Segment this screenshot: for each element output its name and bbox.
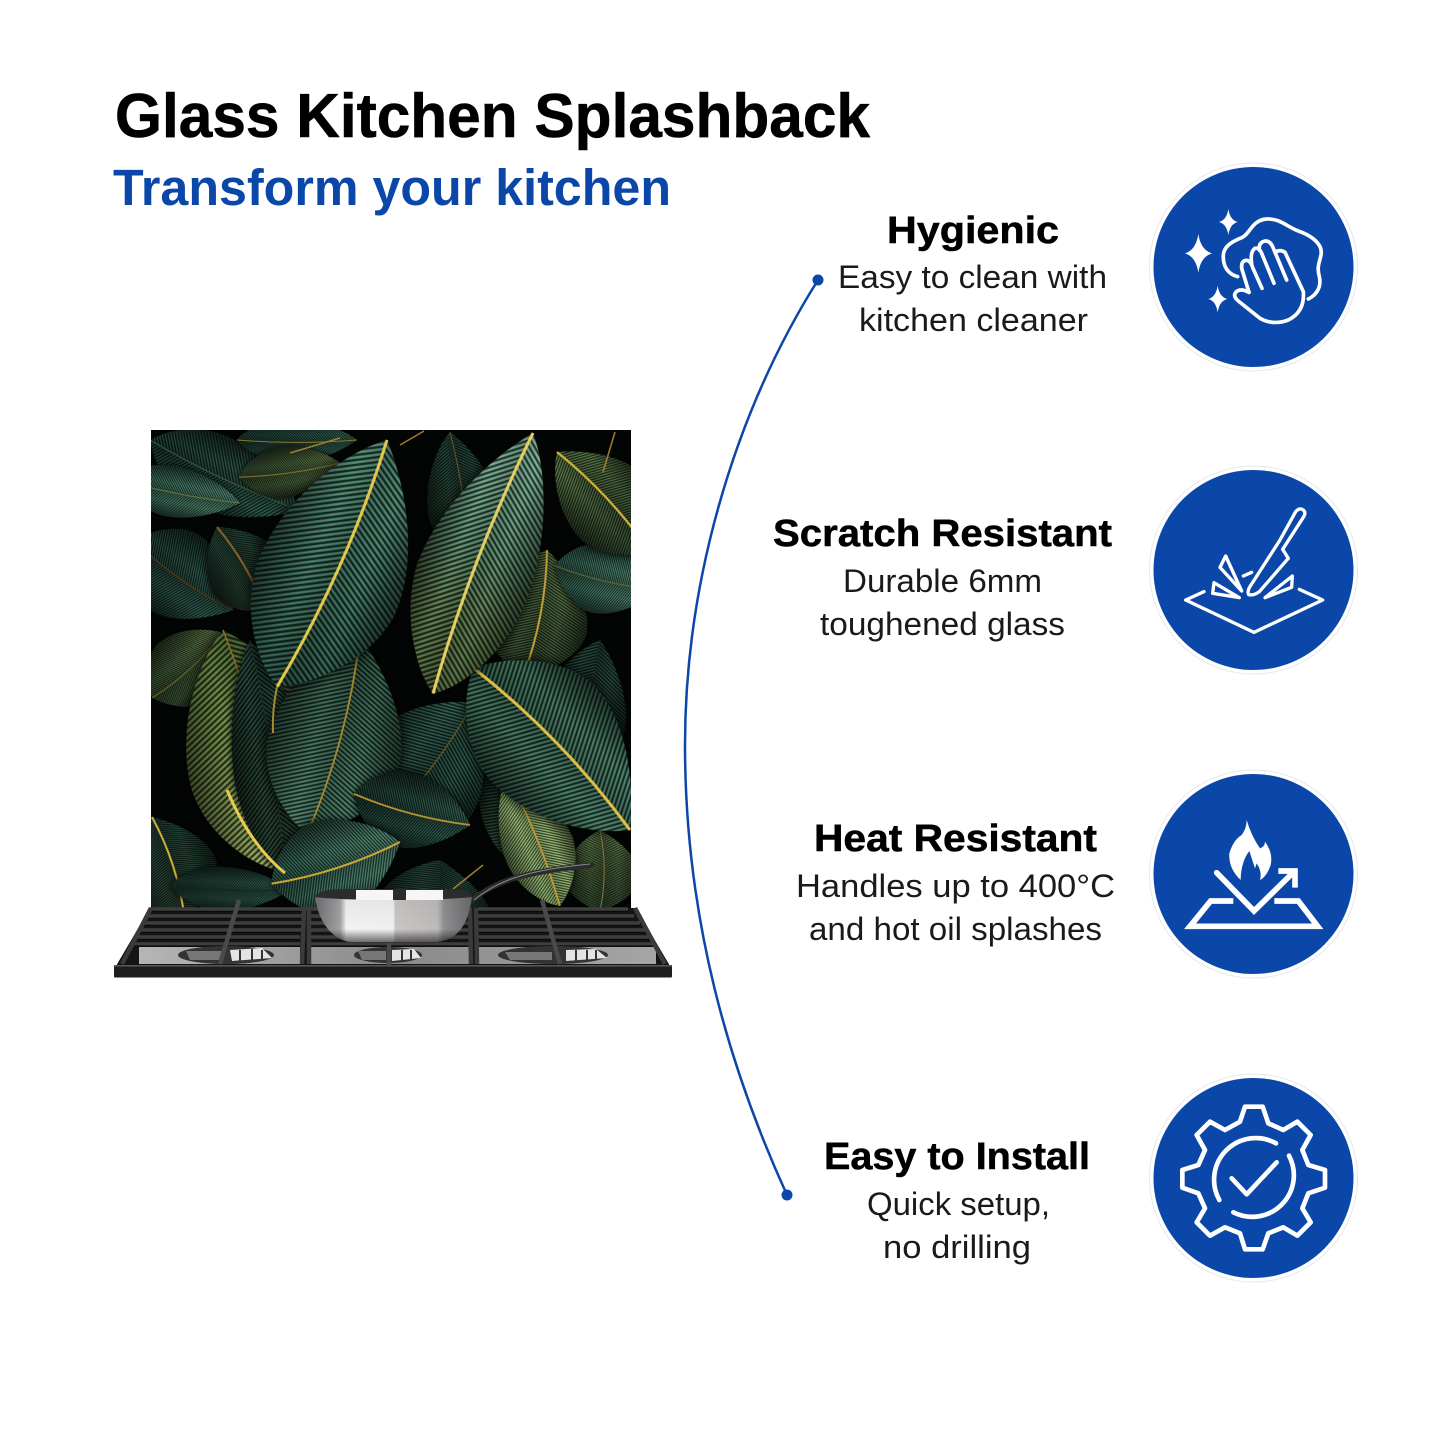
text block: Heat Resistant: and hot oil splashes <box>809 911 1102 947</box>
icon: knife scratching glass <box>1150 466 1358 674</box>
text block: Easy to Install: Easy to Install <box>824 1136 1090 1178</box>
text block: Scratch Resistant: toughened glass <box>820 606 1065 642</box>
icon: gear with check mark <box>1150 1074 1358 1282</box>
text block: Scratch Resistant: Scratch Resistant <box>773 513 1112 555</box>
panel: tropical feather glass splashback <box>151 430 631 908</box>
text block: Hygienic: kitchen cleaner <box>859 302 1088 338</box>
text block: Easy to Install: Quick setup, <box>867 1186 1050 1222</box>
text block: Heat Resistant: Handles up to 400°C <box>796 868 1115 904</box>
gas hob <box>114 900 672 978</box>
title: Glass Kitchen Splashback <box>115 82 870 151</box>
text block: Easy to Install: no drilling <box>883 1229 1031 1265</box>
text block: Scratch Resistant <box>773 513 1112 642</box>
icon: flame over heat-proof surface <box>1150 770 1358 978</box>
text block: Hygienic: Easy to clean with <box>838 259 1107 295</box>
frying pan <box>314 864 592 942</box>
text block: Heat Resistant <box>796 818 1115 947</box>
splashback product image <box>107 408 684 978</box>
text block: Heat Resistant: Heat Resistant <box>814 818 1097 860</box>
text block: Scratch Resistant: Durable 6mm <box>843 563 1042 599</box>
text block: Hygienic <box>838 210 1107 338</box>
connector curve with end dots <box>685 274 824 1200</box>
text block: Hygienic: Hygienic <box>887 210 1059 252</box>
subtitle: Transform your kitchen <box>113 159 671 216</box>
text block: Easy to Install <box>824 1136 1090 1265</box>
icon: hand wiping with sparkles <box>1150 163 1358 371</box>
burners <box>178 946 608 964</box>
